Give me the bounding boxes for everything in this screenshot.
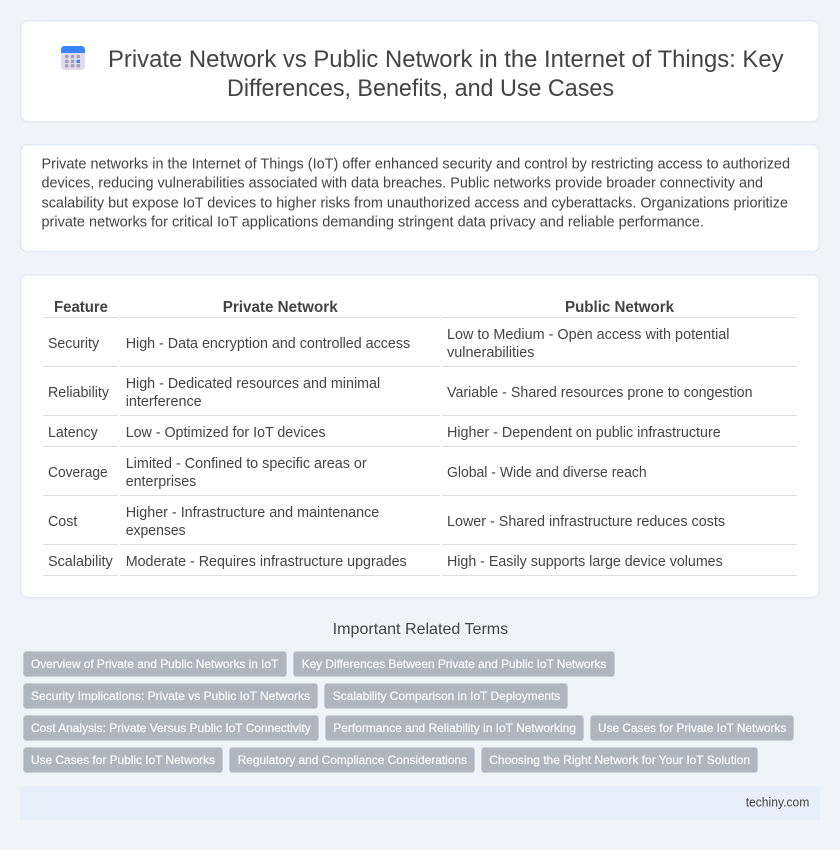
table row: coverage bbox=[43, 456, 797, 496]
title: Private Network vs Public Network in the Internet of Things: Key bbox=[108, 46, 784, 73]
tag: Performance and Reliability in IoT Networking bbox=[333, 721, 576, 735]
table row: coverage: Coverage bbox=[48, 465, 108, 481]
table row: latency: Latency bbox=[48, 425, 98, 441]
text block: intro paragraph: scalability but expose IoT devices to higher risks from unauthorized access and cyberattacks. Organizations prioritize bbox=[42, 195, 788, 211]
table header row: Feature bbox=[54, 299, 108, 316]
tag bbox=[24, 748, 222, 772]
table header row: Public Network bbox=[565, 299, 674, 316]
text block: intro paragraph: private networks for critical IoT applications demanding stringent data privacy and reliable performance. bbox=[42, 215, 704, 231]
title bbox=[108, 46, 784, 102]
tag: Use Cases for Private IoT Networks bbox=[598, 721, 786, 735]
table row: cost: Higher - Infrastructure and maintenance bbox=[126, 505, 379, 521]
tag: Use Cases for Public IoT Networks bbox=[31, 753, 215, 767]
panel: description bbox=[21, 145, 819, 252]
table row: security bbox=[43, 327, 797, 367]
table row: reliability: interference bbox=[126, 394, 202, 410]
table row: cost bbox=[43, 505, 797, 545]
table row: coverage: enterprises bbox=[126, 474, 196, 490]
tag bbox=[230, 748, 474, 772]
tag bbox=[24, 716, 318, 740]
table row: reliability: Variable - Shared resources prone to congestion bbox=[447, 385, 752, 401]
table row: latency: Higher - Dependent on public infrastructure bbox=[447, 425, 721, 441]
table row: security: Low to Medium - Open access with potential bbox=[447, 327, 730, 343]
text block: intro paragraph: devices, reducing vulnerabilities associated with data breaches. Public networks provide broader connectivity and bbox=[42, 176, 763, 192]
table row: coverage: Global - Wide and diverse reach bbox=[447, 465, 647, 481]
tag bbox=[590, 716, 794, 740]
text block: intro paragraph: Private networks in the Internet of Things (IoT) offer enhanced security and control by restricting access to authorized bbox=[42, 156, 790, 172]
tag bbox=[24, 684, 318, 708]
panel: related term tags bbox=[24, 652, 794, 772]
tag: Security Implications: Private vs Public IoT Networks bbox=[31, 689, 310, 703]
tag: Regulatory and Compliance Considerations bbox=[238, 753, 467, 767]
table row: cost: Lower - Shared infrastructure reduces costs bbox=[447, 514, 725, 530]
table row: cost: Cost bbox=[48, 514, 77, 530]
footer bbox=[20, 786, 820, 820]
table row: scalability bbox=[43, 554, 797, 576]
heading: important related terms: Important Related Terms bbox=[333, 621, 508, 638]
tag: Overview of Private and Public Networks in IoT bbox=[31, 657, 279, 671]
table header row bbox=[43, 299, 797, 318]
table row: scalability: Moderate - Requires infrastructure upgrades bbox=[126, 554, 407, 570]
footer credit: techiny.com bbox=[746, 795, 809, 810]
panel: header bbox=[21, 21, 819, 122]
tag: Scalability Comparison in IoT Deployments bbox=[333, 689, 560, 703]
tag bbox=[326, 716, 584, 740]
table row: reliability bbox=[43, 376, 797, 416]
table row: reliability: Reliability bbox=[48, 385, 110, 401]
table row: cost: expenses bbox=[126, 523, 186, 539]
title: Differences, Benefits, and Use Cases bbox=[227, 75, 614, 102]
table row: security: Security bbox=[48, 336, 100, 352]
panel: comparison table bbox=[21, 275, 819, 598]
tag bbox=[324, 684, 568, 708]
tag bbox=[482, 748, 758, 772]
table row: scalability: Scalability bbox=[48, 554, 113, 570]
tag bbox=[294, 652, 614, 676]
table row: scalability: High - Easily supports large device volumes bbox=[447, 554, 723, 570]
text block: intro paragraph bbox=[42, 156, 790, 231]
tag bbox=[24, 652, 286, 676]
tag: Cost Analysis: Private Versus Public IoT Connectivity bbox=[31, 721, 311, 735]
icon: calendar bbox=[61, 46, 85, 70]
table row: latency: Low - Optimized for IoT devices bbox=[126, 425, 326, 441]
table row: coverage: Limited - Confined to specific areas or bbox=[126, 456, 367, 472]
table header row: Private Network bbox=[223, 299, 338, 316]
tag: Choosing the Right Network for Your IoT Solution bbox=[489, 753, 750, 767]
tag: Key Differences Between Private and Public IoT Networks bbox=[302, 657, 606, 671]
table row: security: High - Data encryption and controlled access bbox=[126, 336, 410, 352]
table row: reliability: High - Dedicated resources and minimal bbox=[126, 376, 380, 392]
table row: security: vulnerabilities bbox=[447, 345, 534, 361]
table row: latency bbox=[43, 425, 797, 447]
